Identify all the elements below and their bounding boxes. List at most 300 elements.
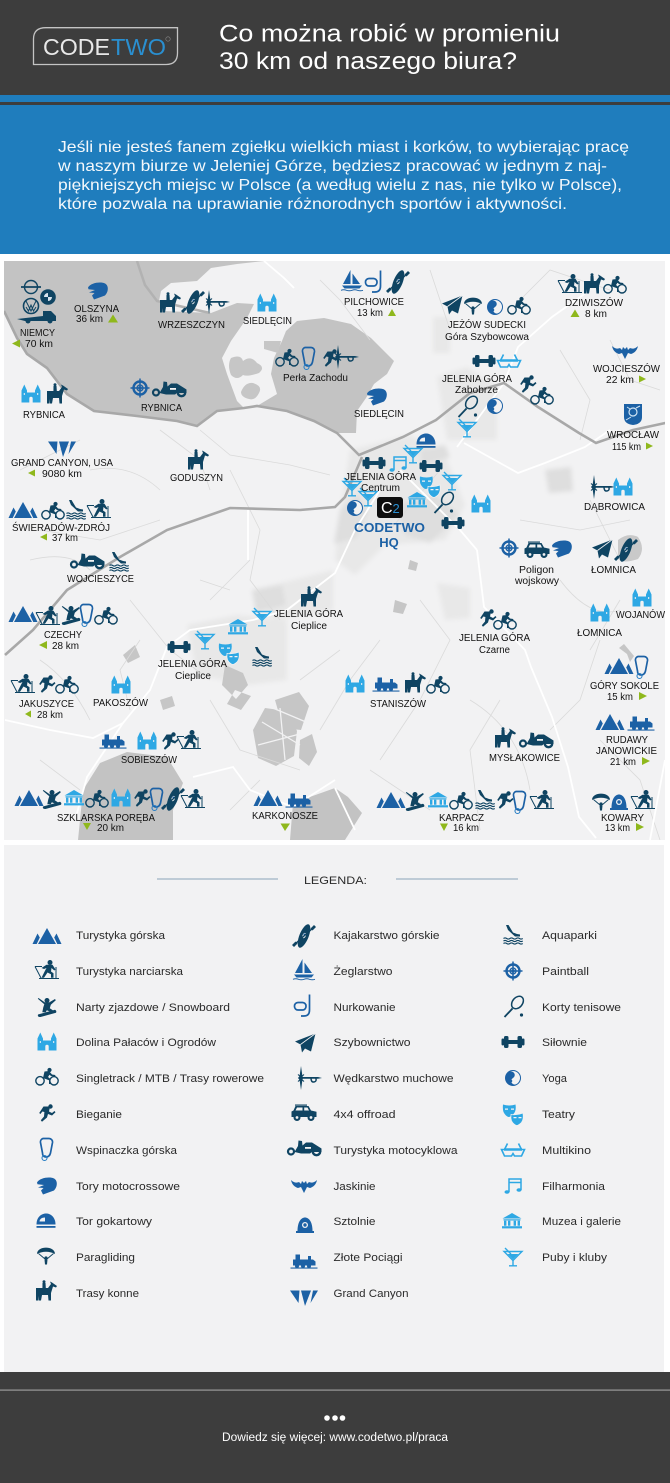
label: RYBNICA bbox=[23, 410, 65, 421]
arrow: east bbox=[639, 376, 646, 382]
icon: carabiner bbox=[80, 604, 93, 626]
icon: pub bbox=[196, 631, 214, 649]
logo: C2 bbox=[377, 497, 403, 518]
icon: mountains bbox=[8, 606, 38, 622]
intro panel bbox=[0, 105, 670, 254]
label: ŚWIERADÓW-ZDRÓJ bbox=[12, 521, 110, 534]
icon: bike bbox=[531, 387, 553, 404]
icon: kayak bbox=[181, 289, 205, 315]
label: DZIWISZÓW bbox=[565, 296, 624, 309]
icon: motocross bbox=[552, 541, 572, 558]
arrow: east bbox=[646, 442, 653, 450]
icon: snowboard bbox=[406, 792, 424, 811]
entry: fly fishing bbox=[298, 1066, 454, 1090]
icon: horse bbox=[160, 292, 181, 312]
icon: horse bbox=[188, 449, 209, 470]
icon: gym bbox=[362, 457, 386, 469]
icon: tennis bbox=[434, 490, 456, 513]
icon: ski touring bbox=[631, 790, 655, 808]
label: JELENIA GÓRA bbox=[459, 631, 530, 644]
label: JELENIA GÓRA bbox=[274, 607, 343, 620]
icon: theatre bbox=[420, 476, 440, 498]
icon: tow truck bbox=[17, 311, 56, 324]
distance: 20 km bbox=[97, 823, 124, 834]
intro text: piękniejszych miejsc w Polsce (a według wielu z nas, nie tylko w Polsce), bbox=[58, 177, 622, 194]
CodeTwo HQ marker bbox=[354, 497, 425, 550]
icon: castle bbox=[258, 294, 276, 312]
arrow: east bbox=[642, 757, 650, 765]
entry: castles: Dolina Pałaców i Ogrodów bbox=[76, 1037, 216, 1049]
icon: canyon bbox=[48, 442, 76, 457]
arrow: north bbox=[388, 309, 396, 316]
entry: yoga: Yoga bbox=[542, 1073, 568, 1085]
location: Grand Canyon bbox=[11, 442, 113, 480]
arrow: west bbox=[12, 340, 20, 348]
icon: gym bbox=[472, 355, 496, 367]
location: Niemcy bbox=[12, 280, 56, 350]
location: Poligon wojskowy bbox=[500, 538, 572, 587]
sublabel: wojskowy bbox=[514, 576, 559, 587]
label: JELENIA GÓRA bbox=[345, 470, 416, 483]
icon: castle bbox=[138, 732, 156, 750]
entry: gliding: Szybownictwo bbox=[334, 1037, 410, 1049]
icon: pub bbox=[458, 419, 476, 437]
label: CodeTwo HQ: CODETWO bbox=[354, 520, 425, 535]
label: PILCHOWICE bbox=[344, 297, 404, 308]
icon: castle bbox=[590, 604, 610, 622]
icon: gym bbox=[420, 460, 442, 472]
sublabel: Centrum bbox=[361, 483, 400, 494]
location: Wojcieszyce bbox=[67, 552, 134, 585]
icon: horse bbox=[301, 586, 322, 606]
location: Sobieszów bbox=[100, 730, 201, 766]
arrow: east bbox=[639, 692, 647, 700]
arrow: south bbox=[280, 824, 290, 831]
location: Rybnica east bbox=[130, 378, 186, 414]
icon: paintball bbox=[130, 378, 150, 398]
location: Góry Sokole bbox=[590, 656, 659, 703]
icon: mountains bbox=[254, 790, 282, 806]
icon: mountains bbox=[8, 502, 38, 518]
icon: museum bbox=[428, 792, 448, 807]
entry: running: Bieganie bbox=[76, 1109, 122, 1121]
entry: golden trains: Złote Pociągi bbox=[334, 1252, 402, 1264]
entry: cinema: Multikino bbox=[542, 1145, 591, 1157]
location: Mysłakowice bbox=[489, 727, 560, 764]
entry: sailing bbox=[293, 959, 392, 980]
icon: castle bbox=[112, 676, 130, 694]
icon: gym bbox=[442, 517, 464, 529]
icon: museum bbox=[228, 619, 248, 634]
panel: map bbox=[4, 261, 670, 840]
entry: sailing: Żeglarstwo bbox=[334, 965, 392, 978]
icon: fly fishing bbox=[206, 290, 230, 314]
distance: 13 km bbox=[357, 308, 383, 319]
entry: paintball: Paintball bbox=[542, 966, 589, 978]
icon: bike bbox=[276, 349, 298, 366]
icon: castle bbox=[112, 788, 130, 806]
location: Wojanów bbox=[616, 588, 666, 621]
legend column 2 bbox=[288, 923, 458, 1306]
sublabel: Cieplice bbox=[175, 671, 211, 682]
location: Dziwiszów bbox=[558, 273, 626, 320]
icon: carabiner bbox=[513, 791, 526, 814]
arrow: north bbox=[570, 310, 580, 317]
entry: snowboard bbox=[38, 998, 230, 1017]
icon: ski touring bbox=[177, 730, 201, 748]
icon: castle bbox=[346, 674, 364, 692]
entry: golden trains bbox=[290, 1252, 402, 1269]
entry: running bbox=[39, 1104, 122, 1122]
label: Perła Zachodu bbox=[283, 373, 348, 384]
icon: running bbox=[480, 609, 496, 627]
label: KOWARY bbox=[601, 813, 644, 824]
location: Jelenia Góra Cieplice east bbox=[253, 586, 343, 632]
logo: C2: 2 bbox=[392, 501, 400, 516]
icon: castle bbox=[472, 494, 490, 512]
title: 30 km od naszego biura? bbox=[219, 48, 517, 75]
icon: running bbox=[497, 791, 514, 809]
icon: kayak bbox=[161, 786, 185, 812]
icon: bike bbox=[86, 790, 108, 807]
icon: karting bbox=[416, 434, 436, 448]
header band bbox=[0, 0, 670, 105]
label: WOJCIESZÓW bbox=[593, 362, 661, 375]
icon: city crest bbox=[624, 404, 642, 425]
entry: fly fishing: Wędkarstwo muchowe bbox=[334, 1073, 454, 1085]
entry: grand canyon: Grand Canyon bbox=[334, 1288, 408, 1300]
icon: carabiner bbox=[302, 347, 315, 370]
entry: castles bbox=[38, 1032, 216, 1050]
distance: 37 km bbox=[52, 533, 78, 544]
label: GRAND CANYON, USA bbox=[11, 458, 113, 469]
entry: museums bbox=[502, 1213, 621, 1228]
icon: motorcycle bbox=[520, 732, 554, 747]
footer link text: Dowiedz się więcej: www.codetwo.pl/praca bbox=[222, 1432, 449, 1444]
entry: philharmonic bbox=[504, 1179, 606, 1194]
label: KARKONOSZE bbox=[252, 811, 318, 822]
location: Kowary bbox=[592, 790, 655, 834]
entry: diving bbox=[294, 994, 396, 1016]
label: JAKUSZYCE bbox=[19, 699, 74, 710]
icon: yoga bbox=[487, 396, 505, 414]
label: ŁOMNICA bbox=[577, 628, 622, 639]
entry: pubs: Puby i kluby bbox=[542, 1252, 608, 1264]
distance: 21 km bbox=[610, 757, 636, 768]
icon: pub bbox=[253, 608, 271, 626]
entry: mountains bbox=[32, 928, 166, 944]
label: Niemcy: NIEMCY bbox=[20, 328, 55, 339]
icon: BMW bbox=[40, 289, 56, 305]
distance: 115 km bbox=[612, 442, 641, 453]
entry: pubs bbox=[504, 1248, 608, 1266]
entry: karting bbox=[36, 1214, 153, 1228]
entry: karting: Tor gokartowy bbox=[76, 1216, 153, 1228]
panel: legend bbox=[4, 845, 664, 1372]
distance: 16 km bbox=[453, 823, 479, 834]
sublabel: Cieplice bbox=[291, 621, 327, 632]
legend heading: LEGENDA: bbox=[304, 875, 367, 887]
location: Siedlęcin south bbox=[354, 389, 404, 420]
arrow: west bbox=[28, 470, 35, 476]
icon: paraglider bbox=[592, 794, 610, 810]
distance: 9080 km bbox=[42, 469, 82, 480]
icon: sailing bbox=[341, 270, 363, 291]
label: RUDAWY bbox=[606, 735, 648, 746]
icon: Opel bbox=[21, 280, 41, 294]
icon: bike bbox=[56, 676, 78, 693]
distance: 36 km bbox=[76, 314, 103, 325]
entry: ski touring: Turystyka narciarska bbox=[76, 966, 184, 978]
location: Jelenia Góra Centrum bbox=[343, 434, 490, 529]
entry: mines: Sztolnie bbox=[334, 1216, 376, 1228]
arrow: south bbox=[83, 823, 91, 830]
icon: horse bbox=[495, 727, 516, 748]
icon: train bbox=[628, 716, 654, 731]
logo: C2: C bbox=[381, 500, 393, 517]
entry: motocross bbox=[37, 1178, 180, 1194]
title: Co można robić w promieniu bbox=[219, 20, 560, 48]
icon: cinema bbox=[498, 354, 520, 367]
icon: bike bbox=[494, 612, 516, 629]
icon: ski touring bbox=[11, 674, 35, 692]
label: WOJCIESZYCE bbox=[67, 574, 134, 585]
footer bbox=[0, 1372, 670, 1483]
icon: fly fishing bbox=[591, 475, 615, 499]
distance: 70 km bbox=[25, 339, 53, 350]
icon: aquapark bbox=[110, 552, 129, 571]
location: Jelenia Góra Zabobrze bbox=[442, 354, 553, 437]
label: SZKLARSKA PORĘBA bbox=[57, 813, 155, 824]
icon: train bbox=[286, 794, 312, 808]
icon: aquapark bbox=[66, 500, 86, 519]
location: Karkonosze bbox=[252, 790, 318, 831]
location: Wrocław bbox=[607, 404, 660, 453]
arrow: south bbox=[440, 824, 448, 831]
location: Jelenia Góra Cieplice west bbox=[158, 619, 272, 682]
entry: grand canyon bbox=[290, 1288, 408, 1306]
icon: kayak bbox=[614, 537, 638, 563]
location: Wojcieszów bbox=[593, 346, 661, 386]
location: Świeradów-Zdrój bbox=[8, 499, 111, 544]
icon: yoga bbox=[487, 297, 505, 315]
entry: motocross: Tory motocrossowe bbox=[76, 1181, 180, 1193]
entry: kayak: Kajakarstwo górskie bbox=[334, 930, 440, 942]
label: Poligon bbox=[519, 565, 554, 576]
label: CodeTwo HQ bbox=[354, 520, 425, 550]
logo: CodeTwo bbox=[34, 28, 178, 64]
icon: running bbox=[162, 732, 178, 750]
icon: snowboard bbox=[62, 606, 80, 625]
icon: pub bbox=[343, 478, 361, 496]
entry: tennis bbox=[504, 994, 621, 1017]
intro text: które pozwala na uprawianie różnorodnych sportów i aktywności. bbox=[58, 196, 567, 213]
icon: fly fishing bbox=[335, 345, 359, 369]
icon: horse bbox=[405, 672, 426, 692]
entry: gym: Siłownie bbox=[542, 1037, 587, 1049]
icon: ski touring bbox=[87, 499, 111, 518]
label: MYSŁAKOWICE bbox=[489, 753, 560, 764]
icon: carabiner bbox=[635, 656, 648, 678]
sublabel: Czarne bbox=[479, 645, 510, 656]
entry: bike bbox=[36, 1068, 264, 1085]
entry: mountains: Turystyka górska bbox=[76, 930, 166, 942]
intro text: w naszym biurze w Jeleniej Górze, będziesz pracować w jednym z naj- bbox=[57, 158, 607, 175]
icon: aquapark bbox=[476, 790, 495, 809]
label: GÓRY SOKOLE bbox=[590, 679, 659, 692]
sublabel: Zabobrze bbox=[455, 385, 498, 396]
logo: CodeTwo: TWO bbox=[111, 34, 166, 60]
entry: gliding bbox=[295, 1034, 410, 1052]
label: RYBNICA bbox=[141, 403, 182, 414]
entry: offroad: 4x4 offroad bbox=[334, 1109, 396, 1121]
icon: train bbox=[372, 678, 400, 692]
entry: caves: Jaskinie bbox=[334, 1181, 376, 1193]
icon: museum bbox=[407, 492, 427, 507]
entry: aquapark bbox=[504, 925, 597, 944]
icon: yoga bbox=[347, 498, 365, 516]
legend column 1 bbox=[32, 928, 264, 1300]
icon: motocross bbox=[367, 389, 387, 406]
label: CZECHY bbox=[44, 630, 82, 641]
icon: pub bbox=[404, 445, 422, 463]
location: Dąbrowica bbox=[584, 475, 645, 513]
label: SIEDLĘCIN bbox=[354, 409, 404, 420]
icon: bike bbox=[427, 676, 449, 693]
location: Olszyna bbox=[74, 283, 119, 325]
icon: paintball bbox=[500, 538, 518, 558]
label: KARPACZ bbox=[439, 813, 484, 824]
entry: paragliding bbox=[37, 1248, 135, 1264]
distance: 28 km bbox=[52, 641, 79, 652]
entry: bike: Singletrack / MTB / Trasy rowerowe bbox=[76, 1073, 264, 1085]
location: Rybnica west bbox=[22, 383, 68, 421]
label: WOJANÓW bbox=[616, 608, 666, 621]
entry: tennis: Korty tenisowe bbox=[542, 1002, 621, 1014]
entry: theatre: Teatry bbox=[542, 1109, 576, 1121]
icon: bike bbox=[450, 792, 472, 809]
entry: yoga bbox=[505, 1068, 568, 1086]
icon: running bbox=[520, 375, 536, 393]
icon: mine bbox=[610, 794, 628, 810]
sublabel: Góra Szybowcowa bbox=[445, 332, 529, 343]
entry: theatre bbox=[503, 1104, 576, 1126]
entry: motorcycle: Turystyka motocyklowa bbox=[334, 1145, 458, 1157]
entry: horse trails: Trasy konne bbox=[76, 1288, 139, 1300]
entry: horse trails bbox=[36, 1280, 139, 1300]
icon: gym bbox=[168, 641, 190, 653]
entry: climbing bbox=[40, 1138, 178, 1160]
icon: motocross bbox=[88, 283, 108, 300]
distance: 15 km bbox=[607, 692, 633, 703]
intro text bbox=[57, 139, 629, 213]
location: Czechy bbox=[8, 604, 117, 652]
location: Jakuszyce bbox=[11, 674, 78, 721]
icon: kayak bbox=[386, 269, 410, 295]
icon: ski touring bbox=[181, 789, 205, 808]
map base: forests, roads and towns bbox=[4, 261, 670, 840]
icon: castle bbox=[614, 478, 632, 496]
icon: running bbox=[134, 789, 150, 807]
entry: caves bbox=[291, 1180, 376, 1193]
location: Jeżów Sudecki bbox=[442, 296, 530, 343]
icon: museum bbox=[64, 790, 84, 805]
icon: bike bbox=[604, 276, 626, 293]
location: Karpacz bbox=[376, 790, 554, 834]
icon: bike bbox=[42, 502, 64, 519]
location: Siedlęcin north bbox=[243, 294, 292, 327]
icon: bat bbox=[612, 346, 638, 359]
icon: running bbox=[323, 349, 340, 367]
distance: 8 km bbox=[585, 309, 607, 320]
distance: 13 km bbox=[605, 823, 630, 834]
location: Staniszów bbox=[346, 672, 449, 710]
location: Rudawy Janowickie bbox=[596, 714, 657, 768]
entry: cinema bbox=[502, 1144, 591, 1157]
entry: mines bbox=[296, 1216, 376, 1233]
location: Goduszyn bbox=[170, 449, 223, 484]
location: Pakoszów bbox=[93, 676, 149, 709]
arrow: west bbox=[40, 534, 47, 540]
icon: glider bbox=[592, 540, 612, 558]
icon: castle bbox=[632, 588, 652, 606]
icon: pub bbox=[443, 472, 461, 490]
label: PAKOSZÓW bbox=[93, 696, 149, 709]
entry: snowboard: Narty zjazdowe / Snowboard bbox=[76, 1002, 230, 1014]
icon: philharmonic bbox=[390, 457, 406, 472]
icon: horse bbox=[47, 383, 68, 404]
label: GODUSZYN bbox=[170, 473, 223, 484]
icon: mountains bbox=[14, 790, 44, 806]
entry: philharmonic: Filharmonia bbox=[542, 1181, 606, 1193]
entry: kayak bbox=[292, 923, 440, 949]
icon: mountains bbox=[596, 714, 624, 730]
entry: aquapark: Aquaparki bbox=[542, 930, 597, 942]
label: STANISZÓW bbox=[370, 697, 427, 710]
label: WROCŁAW bbox=[607, 430, 660, 441]
location: Jelenia Góra Czarne bbox=[459, 609, 530, 656]
entry: paintball bbox=[504, 962, 589, 980]
legend column 3 bbox=[502, 925, 621, 1266]
icon: motorcycle bbox=[153, 382, 186, 396]
location: Łomnica north bbox=[591, 537, 638, 576]
label: DĄBROWICA bbox=[584, 502, 645, 513]
entry: offroad bbox=[292, 1104, 396, 1121]
distance: 22 km bbox=[606, 375, 634, 386]
label: JELENIA GÓRA bbox=[158, 657, 227, 670]
entry: paragliding: Paragliding bbox=[76, 1252, 135, 1264]
icon: horse bbox=[584, 273, 605, 294]
label: JELENIA GÓRA bbox=[442, 372, 512, 385]
entry: ski touring bbox=[35, 960, 184, 978]
icon: theatre bbox=[219, 644, 239, 664]
entry: motorcycle bbox=[288, 1140, 458, 1157]
icon: ski touring bbox=[530, 790, 554, 808]
arrow: west bbox=[25, 710, 31, 718]
icon: snowboard bbox=[43, 790, 61, 809]
label: WRZESZCZYN bbox=[158, 320, 225, 331]
label: SIEDLĘCIN bbox=[243, 316, 292, 327]
icon: motorcycle bbox=[71, 554, 104, 568]
logo: CodeTwo: CODE bbox=[43, 34, 110, 60]
icon: mountains bbox=[604, 658, 634, 674]
entry: climbing: Wspinaczka górska bbox=[76, 1145, 178, 1157]
icon: carabiner bbox=[150, 788, 163, 810]
arrow: west bbox=[39, 641, 47, 649]
icon: Volkswagen bbox=[24, 298, 38, 314]
entry: museums: Muzea i galerie bbox=[542, 1216, 621, 1228]
icon: mountains bbox=[376, 792, 406, 808]
